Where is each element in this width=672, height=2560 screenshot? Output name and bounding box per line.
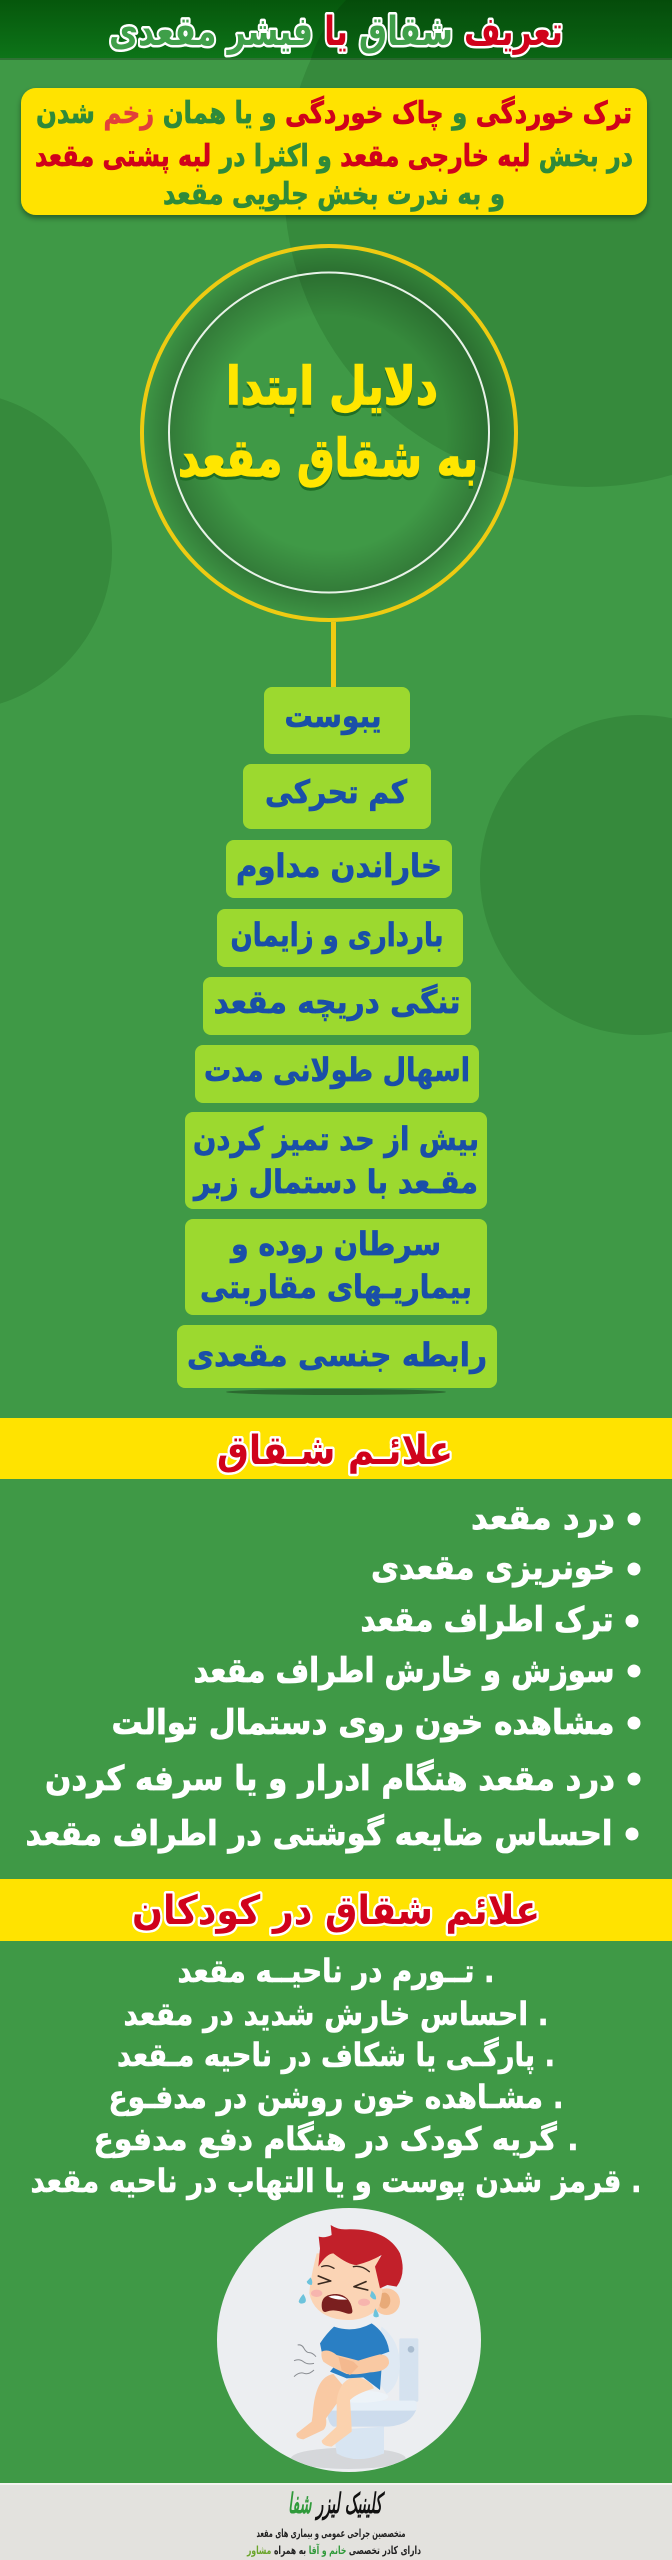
symptom 6: درد مقعد هنگام ادرار و یا سرفه کردن xyxy=(45,1759,615,1799)
causes heading line 1: دلایل ابتدا xyxy=(226,357,438,417)
cause 5 xyxy=(203,977,471,1035)
children symptoms list xyxy=(30,1952,642,2200)
cause 5: تنگی دریچه مقعد xyxy=(214,983,460,1021)
cause 4: بارداری و زایمان xyxy=(230,916,444,954)
cause 7 xyxy=(185,1112,487,1209)
causes heading line 2: به شقاق مقعد xyxy=(178,429,478,489)
symptoms list xyxy=(26,1498,640,1854)
symptom 2: خونریزی مقعدی xyxy=(371,1548,615,1588)
cause 3: خاراندن مداوم xyxy=(236,847,442,885)
children band xyxy=(0,1879,672,1941)
header band xyxy=(0,0,672,60)
cause 3 xyxy=(226,840,452,898)
symptoms heading: علائـم شـقاق xyxy=(217,1428,453,1474)
cause 6 xyxy=(195,1045,479,1103)
title: تعریف شقاق یا فیشر مقعدی xyxy=(109,9,563,55)
cause 2 xyxy=(243,764,431,829)
cause 9 xyxy=(177,1325,497,1388)
cause 7: مقـعد با دستمال زبر xyxy=(192,1163,478,1201)
child symptom 2: . احساس خارش شدید در مقعد xyxy=(124,1995,548,2033)
cause 7: بیش از حد تمیز کردن xyxy=(193,1120,479,1158)
illustration: crying child on toilet xyxy=(217,2208,481,2472)
footer line 2: دارای کادر تخصصی خانم و آقا به همراه مشاور xyxy=(246,2543,421,2557)
symptom 5: مشاهده خون روی دستمال توالت xyxy=(112,1703,614,1743)
child symptom 3: . پارگـی یا شکاف در ناحیه مـقعد xyxy=(117,2036,555,2074)
clinic logo: کلینیک لیزر شفا xyxy=(288,2487,385,2521)
child symptom 5: . گریه کودک در هنگام دفع مدفوع xyxy=(94,2120,578,2158)
cause 4 xyxy=(217,909,463,967)
definition line 2: در بخش لبه خارجی مقعد و اکثرا در لبه پشتی مقعد xyxy=(35,139,633,174)
child symptom 1: . تــورم در ناحیــه مقعد xyxy=(178,1952,494,1990)
child symptom 4: . مشـاهده خون روشن در مدفـوع xyxy=(108,2078,564,2116)
definition box xyxy=(21,88,647,215)
symptom 3: ترک اطراف مقعد xyxy=(360,1600,614,1640)
symptom 7: احساس ضایعه گوشتی در اطراف مقعد xyxy=(26,1814,612,1854)
symptoms band xyxy=(0,1389,672,1479)
connector line xyxy=(331,622,336,687)
causes circle xyxy=(141,245,517,621)
footer line 1: متخصصین جراحی عمومی و بیماری های مقعد xyxy=(256,2527,406,2540)
children heading: علائم شقاق در کودکان xyxy=(132,1888,540,1934)
footer xyxy=(0,2483,672,2560)
cause 1 xyxy=(264,687,410,754)
symptom 1: درد مقعد xyxy=(471,1498,615,1538)
cause 8 xyxy=(185,1219,487,1315)
definition line 3: و به ندرت بخش جلویی مقعد xyxy=(163,177,505,212)
definition line 1: ترک خوردگی و چاک خوردگی و یا همان زخم شدن xyxy=(36,95,632,131)
cause 8: سرطان روده و xyxy=(229,1225,441,1263)
cause 1: یبوست xyxy=(284,697,382,735)
cause 2: کم تحرکی xyxy=(265,773,407,811)
cause 9: رابطه جنسی مقعدی xyxy=(187,1336,487,1374)
cause 6: اسهال طولانی مدت xyxy=(204,1051,470,1089)
cause 8: بیماریـهای مقاربتی xyxy=(200,1268,472,1306)
